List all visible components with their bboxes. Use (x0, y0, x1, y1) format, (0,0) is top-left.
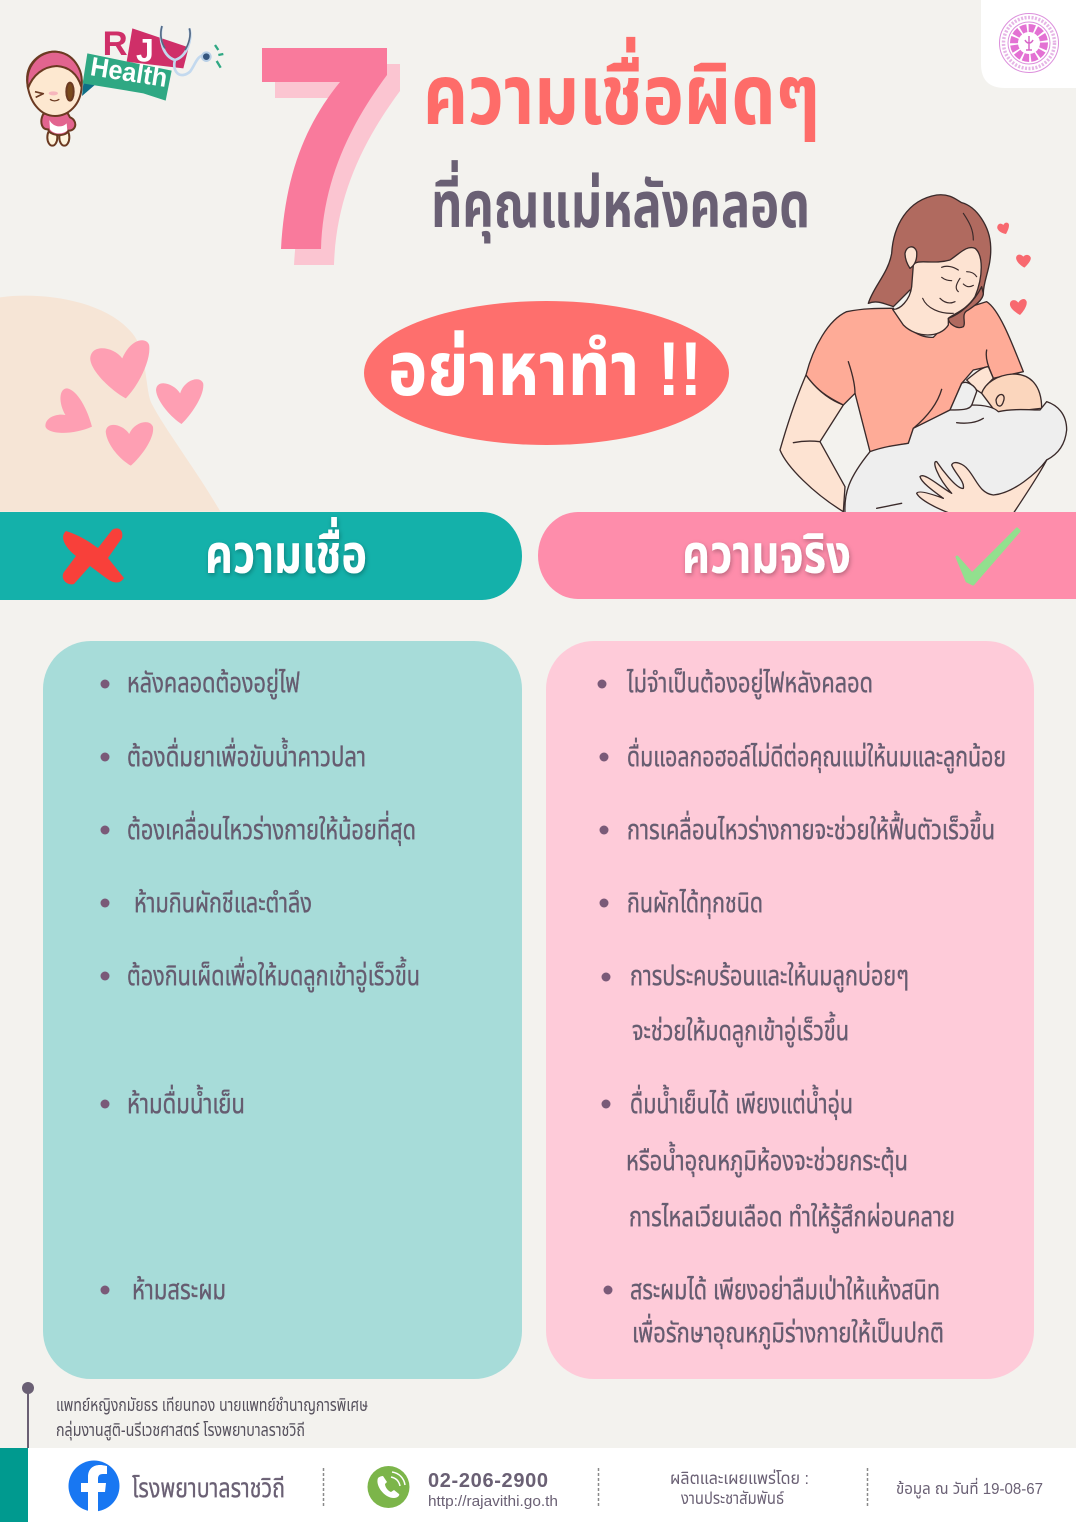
logo seal (1000, 14, 1058, 72)
forearm behind baby (967, 367, 993, 393)
baby sleeve (950, 382, 977, 410)
panel: facts: กินผักได้ทุกชนิด (627, 887, 763, 919)
icon: green check (957, 529, 1019, 584)
mascot (27, 52, 82, 146)
author credit (22, 1382, 368, 1448)
band: fact heading (538, 512, 1076, 599)
panel: facts: เพื่อรักษาอุณหภูมิร่างกายให้เป็นปกติ (632, 1313, 944, 1350)
blanket (845, 402, 1067, 513)
data date: ข้อมูล ณ วันที่ 19-08-67 (896, 1477, 1043, 1498)
Health banner (83, 53, 172, 101)
heading: fact: ความจริง (682, 525, 851, 585)
panel: myths: ห้ามสระผม (132, 1274, 226, 1305)
small hearts (997, 223, 1031, 315)
producer: ผลิตและเผยแพร่โดย : (670, 1469, 809, 1488)
panel: facts: การประคบร้อนและให้นมลูกบ่อยๆ (630, 960, 909, 993)
panel: myths: ห้ามดื่มน้ำเย็น (127, 1084, 245, 1119)
facial features (923, 213, 977, 313)
facebook label: โรงพยาบาลราชวิถี (132, 1473, 285, 1503)
left forearm (780, 375, 845, 512)
icon: facebook (68, 1460, 120, 1512)
J flag (127, 28, 189, 68)
baby ear (996, 395, 1004, 406)
decorative blob with hearts (0, 296, 220, 512)
panel: facts: สระผมได้ เพียงอย่าลืมเป่าให้แห้งสนิท (630, 1274, 940, 1305)
website: http://rajavithi.go.th (428, 1493, 558, 1510)
stethoscope (161, 26, 203, 75)
callout: do not do it: อย่าหาทำ !! (388, 327, 702, 412)
panel: myths: ต้องดื่มยาเพื่อขับน้ำคาวปลา (127, 737, 366, 772)
baby head (982, 374, 1042, 413)
speech tail (82, 83, 97, 96)
hair lock over shoulder (948, 287, 983, 328)
RJ Health logo with mascot (27, 25, 223, 146)
phone number: 02-206-2900 (428, 1470, 548, 1492)
panel: facts: ดื่มน้ำเย็นได้ เพียงแต่น้ำอุ่น (630, 1084, 853, 1120)
panel: myths (43, 641, 522, 1379)
panel: facts: การไหลเวียนเลือด ทำให้รู้สึกผ่อนคลาย (629, 1201, 955, 1234)
footer bar: งานประชาสัมพันธ์ (681, 1489, 784, 1508)
panel: facts: หรือน้ำอุณหภูมิห้องจะช่วยกระตุ้น (626, 1141, 908, 1178)
icon: phone (368, 1466, 410, 1508)
shirt (806, 302, 1023, 452)
band: myth heading (0, 512, 522, 600)
panel: myths: ต้องกินเผ็ดเพื่อให้มดลูกเข้าอู่เร็วขึ้น (127, 956, 420, 993)
hand (917, 460, 1047, 513)
hair (868, 195, 991, 328)
title line 1: ความเชื่อผิดๆ (423, 36, 820, 142)
panel: facts: จะช่วยให้มดลูกเข้าอู่เร็วขึ้น (632, 1011, 849, 1048)
panel: facts (546, 641, 1034, 1379)
skin of face, neck and chest (893, 248, 981, 335)
panel: myths: หลังคลอดต้องอยู่ไฟ (127, 667, 300, 700)
R: R (103, 25, 128, 63)
title line 2: ที่คุณแม่หลังคลอด (431, 160, 810, 244)
author credit: กลุ่มงานสูติ-นรีเวชศาสตร์ โรงพยาบาลราชวิถี (56, 1420, 305, 1442)
illustration: mother breastfeeding (780, 195, 1067, 513)
J: J (136, 33, 154, 69)
heading: myth: ความเชื่อ (205, 517, 367, 585)
panel: myths: ห้ามกินผักชีและตำลึง (134, 887, 312, 918)
Health word: Health (88, 51, 169, 93)
footer bar (0, 1448, 1076, 1522)
icon: red cross (63, 528, 124, 584)
ear (905, 247, 917, 268)
corner hospital logo (981, 0, 1076, 88)
callout: do not do it (364, 301, 729, 445)
big number 7 (262, 48, 400, 265)
panel: facts: ไม่จำเป็นต้องอยู่ไฟหลังคลอด (626, 667, 873, 700)
author credit: แพทย์หญิงกมัยธร เทียนทอง นายแพทย์ชำนาญการพิเศษ (56, 1395, 368, 1415)
shirt folds (848, 350, 993, 428)
panel: myths: ต้องเคลื่อนไหวร่างกายให้น้อยที่สุด (127, 810, 416, 846)
